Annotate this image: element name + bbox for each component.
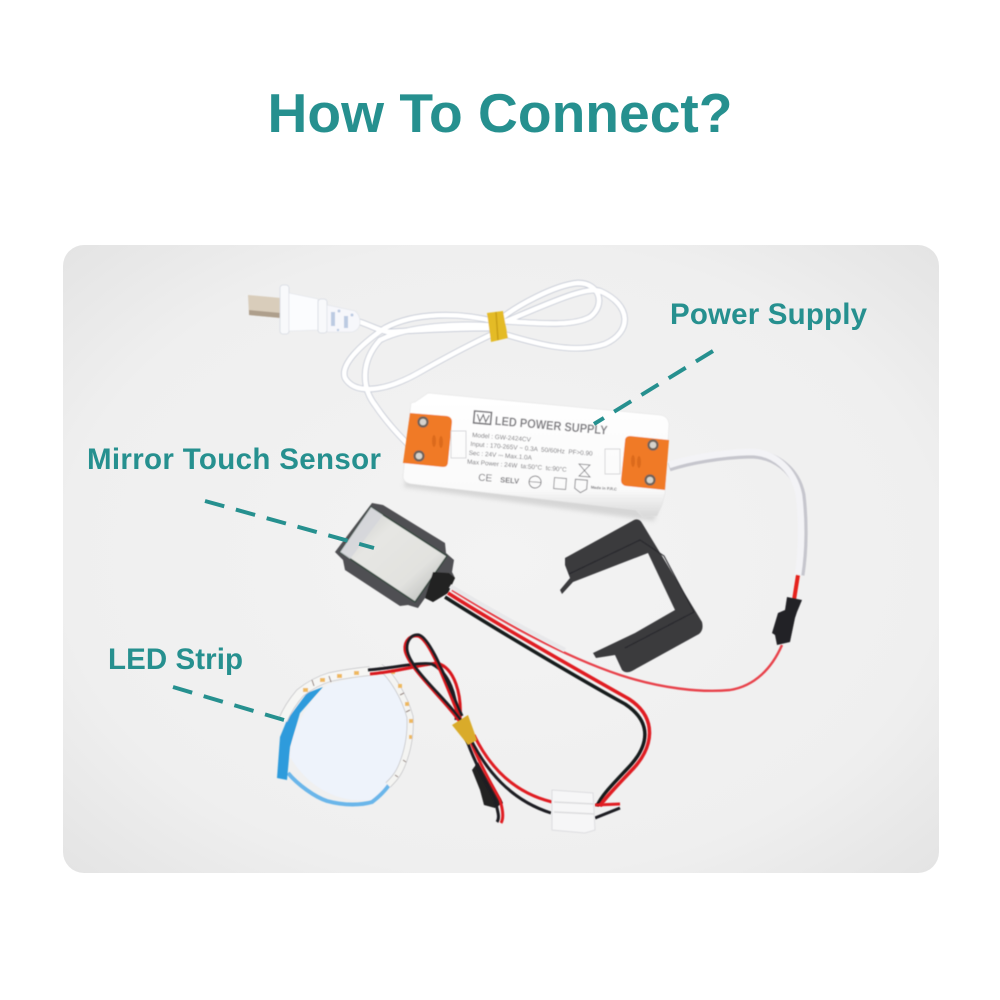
orange terminal right (621, 436, 669, 490)
label: LED Strip: LED Strip (108, 643, 243, 676)
printed label logo and heading: LED POWER SUPPLY (494, 414, 609, 438)
white output cable to connector (452, 452, 803, 691)
plug blades (248, 295, 281, 318)
transparent wire clip (552, 790, 595, 833)
panel: product photo background (63, 245, 939, 873)
strip interior reflection (290, 676, 408, 800)
certification symbols: CE (478, 472, 493, 485)
leader line: Mirror Touch Sensor (205, 501, 374, 548)
hourglass and polarity marks (579, 464, 590, 477)
label: Power Supply: Power Supply (670, 298, 868, 331)
certification symbols (478, 471, 618, 496)
printed specifications (467, 432, 594, 476)
printed specifications: Max Power : 24W ta:50°C tc:90°C (467, 458, 567, 474)
printed specifications: Input : 170-265V ~ 0.3A 50/60Hz PF>0.90 (470, 441, 593, 458)
title: How To Connect? (268, 82, 732, 144)
cord loops (344, 283, 625, 448)
mirror touch sensor (335, 503, 455, 608)
black mounting bracket (560, 519, 703, 672)
strip lead wires with loops (368, 635, 462, 722)
black connector on lead wires (472, 762, 503, 808)
leader line: Power Supply (594, 351, 713, 424)
white power cord with plug (248, 283, 625, 448)
sensor connector (425, 572, 455, 602)
certification symbols: SELV (500, 475, 519, 486)
printed specifications: Model : GW-2424CV (472, 432, 532, 444)
label: Mirror Touch Sensor: Mirror Touch Sensor (87, 443, 382, 476)
certification symbols: Made in P.R.C (591, 485, 617, 492)
red wire stub (794, 575, 798, 600)
yellow cable tie (487, 311, 508, 342)
white LED tape with chips (283, 671, 370, 720)
leader line: LED Strip (173, 687, 284, 720)
black plug connector on output cable (772, 597, 802, 645)
plug body (280, 285, 289, 334)
yellow tape on lead wires (452, 715, 477, 745)
orange terminal left (403, 413, 452, 467)
plug (248, 285, 360, 334)
power supply (403, 393, 669, 521)
lower lead wires (465, 735, 620, 823)
sensor glass (340, 507, 447, 602)
LED strip (277, 667, 413, 804)
sensor red, black and white wires (445, 586, 650, 806)
printed specifications: Sec : 24V ⎓ Max.1.0A (468, 450, 533, 462)
blue backing tape (288, 773, 391, 804)
power supply case (403, 393, 669, 517)
red thin cable (452, 590, 782, 691)
printed label logo and heading (473, 411, 609, 438)
sensor frame (335, 503, 455, 608)
